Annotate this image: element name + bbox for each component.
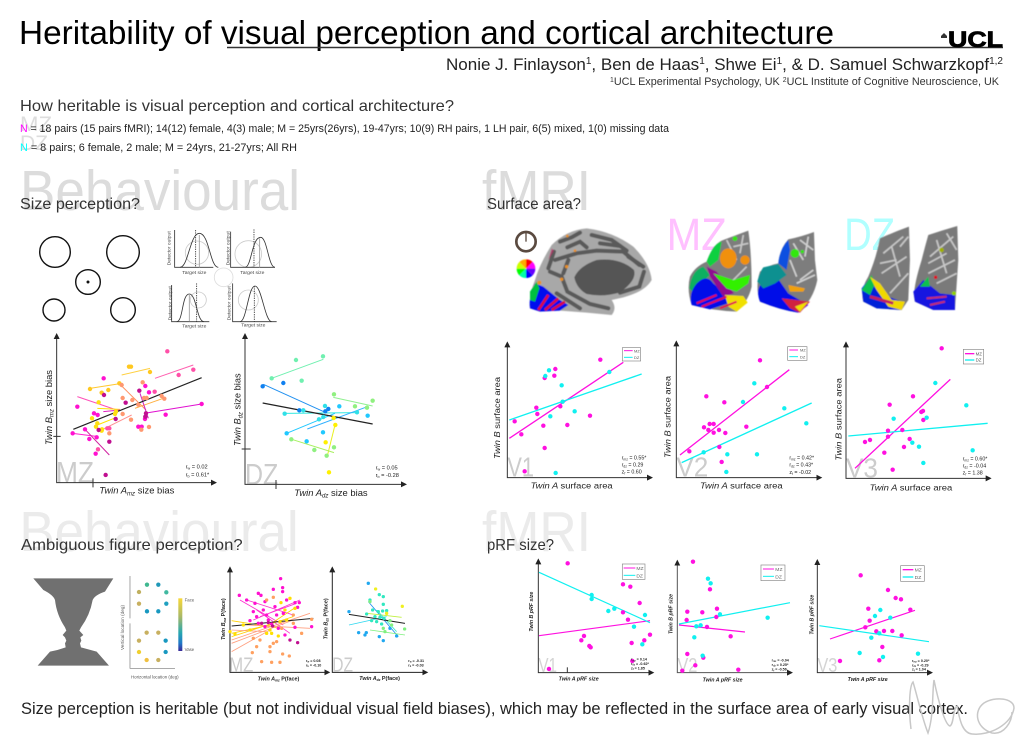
chart: DZ P(face) scatter: DZ <box>332 655 353 677</box>
legend: DZ <box>634 355 640 360</box>
chart: V2 pRF scatter: f <box>773 670 774 672</box>
MZ watermark: MZ <box>56 457 94 490</box>
statistics: r <box>789 455 814 461</box>
chart: MZ P(face) scatter: Twin A <box>258 676 275 682</box>
x axis label: size bias <box>328 488 368 498</box>
V3 watermark: V3 <box>846 453 878 484</box>
statistics: = 0.42* <box>796 455 814 461</box>
chart: MZ P(face) scatter: P(face) <box>221 598 227 618</box>
chart: MZ P(face) scatter <box>221 569 327 682</box>
detector output tuning curves: Target size <box>182 324 207 330</box>
statistics: = 0.43* <box>795 463 813 469</box>
location dot map <box>120 576 195 679</box>
chart: MZ P(face) scatter: r <box>306 663 321 668</box>
panel: size perception <box>20 159 300 330</box>
chart: V1 pRF scatter: V1 <box>538 655 557 677</box>
chart: V2 pRF scatter: Twin A pRF size <box>703 677 743 683</box>
y axis label: Twin B <box>44 417 54 445</box>
authors: , & D. Samuel Schwarzkopf <box>782 55 989 74</box>
statistics: z <box>622 469 642 475</box>
heading watermark: fMRI: fMRI <box>482 500 591 564</box>
detector output tuning curves: Target size <box>240 270 265 276</box>
conclusion: Size perception is heritable (but not individual visual field biases), which may be reflected in the surface area of early visual cortex. <box>21 699 968 718</box>
flat maps: DZ twin A <box>862 227 910 310</box>
chart: MZ size bias scatter <box>44 336 214 497</box>
authors: , Ben de Haas <box>591 55 699 74</box>
statistics: r <box>376 473 399 479</box>
statistics: mz <box>964 458 969 462</box>
chart: V2 pRF scatter: mz <box>773 661 777 663</box>
pair lines <box>73 365 202 455</box>
x axis label: Twin A <box>99 486 127 496</box>
location dot map: Face <box>185 597 195 602</box>
DZ watermark: DZ <box>20 132 48 155</box>
statistics: z <box>963 471 983 477</box>
y axis label: size bias <box>44 370 54 409</box>
chart: V2 pRF scatter <box>669 559 790 683</box>
chart: V2 pRF scatter: = 0.25* <box>776 663 789 667</box>
MZ watermark: MZ <box>20 113 52 136</box>
y axis label: mz <box>50 409 56 417</box>
heading: ambiguous figure: Ambiguous figure perception? <box>21 537 243 554</box>
statistics: mz <box>791 457 796 461</box>
V2 watermark: V2 <box>676 452 708 483</box>
axes <box>53 336 214 487</box>
chart: V3 surface area scatter <box>834 344 989 492</box>
legend: DZ <box>976 358 982 363</box>
statistics: r <box>186 472 210 478</box>
detector output tuning curves: Detector output <box>227 286 233 320</box>
title: Heritability of visual perception and cortical architecture <box>19 14 834 51</box>
charts: pRF V1 and V2 <box>529 559 790 683</box>
heading: size perception: Size perception? <box>20 196 140 213</box>
chart: V3 pRF scatter: V3 <box>817 655 837 677</box>
UCL logo: UCL <box>948 27 1003 52</box>
chart: V3 pRF scatter: r <box>912 659 930 664</box>
heading: pRF size: pRF size? <box>487 537 554 554</box>
chart: V2 pRF scatter: V2 <box>677 655 697 677</box>
statistics: r <box>789 463 813 469</box>
chart: V3 pRF scatter: MZ <box>915 568 922 574</box>
heading watermark: Behavioural: Behavioural <box>20 159 300 223</box>
chart: DZ P(face) scatter: P(face) <box>323 598 329 618</box>
authors: 1 <box>699 56 705 67</box>
chart: DZ P(face) scatter: b <box>410 666 412 668</box>
chart: V2 pRF scatter: = -0.04 <box>776 658 790 662</box>
chart: V3 pRF scatter: z <box>912 668 927 672</box>
axes <box>676 343 819 478</box>
chart: MZ P(face) scatter: w <box>307 662 309 664</box>
chart: V1 pRF scatter <box>529 561 652 682</box>
y axis label: dz <box>238 412 244 418</box>
signature <box>910 680 1014 734</box>
affiliations: UCL Experimental Psychology, UK <box>614 76 783 88</box>
statistics: r <box>963 463 986 469</box>
chart: V3 pRF scatter: DZ <box>915 575 921 581</box>
chart: DZ P(face) scatter: Twin A <box>359 676 376 682</box>
panel: pRF size <box>482 500 930 683</box>
chart: MZ P(face) scatter: mz <box>223 617 227 623</box>
panel: ambiguous figure perception <box>19 500 425 682</box>
statistics: = 0.60* <box>969 456 987 462</box>
legend <box>788 347 807 360</box>
statistics: f <box>624 471 625 475</box>
location dot map: Horizontal location (deg) <box>131 674 179 679</box>
axes <box>846 344 989 478</box>
chart: MZ P(face) scatter: P(face) <box>280 676 300 682</box>
chart: V3 pRF scatter: = 1.04 <box>915 668 927 672</box>
statistics: = 0.55* <box>628 455 646 461</box>
DZ label: DZ <box>844 209 895 260</box>
statistics: b <box>378 475 380 479</box>
regression lines <box>848 379 988 468</box>
statistics: = 0.02 <box>190 465 208 471</box>
chart: V1 pRF scatter: = -0.62* <box>635 662 650 666</box>
statistics: dz <box>964 465 968 469</box>
statistics: = 1.38 <box>966 471 983 477</box>
flat maps: DZ twin B <box>913 226 958 310</box>
y axis label: Twin B surface area <box>492 377 502 459</box>
authors: 1,2 <box>989 56 1003 67</box>
chart: V2 surface area scatter <box>663 343 819 491</box>
rubin vase stimulus <box>33 578 113 666</box>
chart: MZ P(face) scatter: b <box>307 666 309 668</box>
statistics: dz <box>623 464 627 468</box>
chart: V3 pRF scatter: r <box>912 663 929 668</box>
detector output tuning curves: Target size <box>241 323 266 329</box>
chart: V1 pRF scatter: Twin B pRF size <box>529 592 535 632</box>
statistics: f <box>792 472 793 476</box>
legend: MZ <box>976 351 982 356</box>
chart: DZ P(face) scatter: dz <box>377 678 381 682</box>
y axis label: Twin B surface area <box>834 378 844 461</box>
chart: V3 pRF scatter: dz <box>913 666 917 668</box>
chart: V2 pRF scatter: r <box>772 663 789 668</box>
chart: DZ P(face) scatter: = -0.31 <box>412 659 424 663</box>
chart: DZ size bias scatter <box>233 336 404 500</box>
chart: V2 pRF scatter: MZ <box>775 567 783 573</box>
statistics: w <box>378 467 381 471</box>
chart: V1 pRF scatter: Twin A pRF size <box>559 676 599 682</box>
statistics: r <box>376 465 398 471</box>
authors: , Shwe Ei <box>705 55 777 74</box>
chart: V3 pRF scatter: Twin B pRF size <box>809 595 815 635</box>
DZ watermark: DZ <box>245 458 278 491</box>
x axis label: Twin A surface area <box>531 481 613 491</box>
chart: V2 pRF scatter: Twin B pRF size <box>669 594 675 634</box>
legend: MZ <box>634 348 640 353</box>
chart: V3 pRF scatter: f <box>914 670 915 672</box>
chart: V1 pRF scatter: r <box>631 662 650 667</box>
legend: DZ <box>800 354 806 359</box>
data points <box>260 354 375 475</box>
chart: MZ P(face) scatter: Twin B <box>221 623 227 640</box>
chart: V2 pRF scatter: z <box>772 668 787 672</box>
detector output tuning curves: Detector output <box>168 286 174 320</box>
detector output tuning curves: Detector output <box>166 231 172 265</box>
detector output tuning curves: Target size <box>182 270 207 276</box>
chart: V2 pRF scatter: = -0.56 <box>774 668 787 672</box>
chart: DZ P(face) scatter: P(face) <box>380 676 400 682</box>
statistics: r <box>963 456 987 462</box>
brain retinotopy maps <box>516 209 958 315</box>
y axis label: Twin B surface area <box>663 376 673 458</box>
statistics: r <box>186 465 208 471</box>
pair lines <box>263 359 373 456</box>
x axis label: size bias <box>135 486 175 496</box>
flat maps: MZ twin B <box>757 232 817 313</box>
chart: V3 pRF scatter: mz <box>913 662 917 664</box>
flat maps: MZ twin A <box>689 231 752 312</box>
affiliations: 2 <box>783 77 787 84</box>
data points <box>687 358 809 474</box>
MZ label: MZ <box>667 209 727 260</box>
statistics: f <box>965 473 966 477</box>
chart: DZ P(face) scatter: = -0.03 <box>411 663 424 667</box>
statistics: = 0.05 <box>380 465 398 471</box>
chart: V3 pRF scatter <box>809 562 930 683</box>
chart: V1 pRF scatter: MZ <box>636 566 644 572</box>
statistics: w <box>188 467 191 471</box>
statistics: = -0.02 <box>793 470 811 476</box>
chart: MZ P(face) scatter: r <box>306 659 321 664</box>
chart: MZ P(face) scatter: MZ <box>229 655 253 677</box>
chart: DZ P(face) scatter: r <box>408 659 424 664</box>
chart: V1 pRF scatter: dz <box>632 665 636 667</box>
chart: MZ P(face) scatter: = 0.08 <box>309 659 321 663</box>
location dot map: Vertical location (deg) <box>120 605 125 650</box>
regression lines <box>509 362 642 438</box>
chart: DZ P(face) scatter: dz <box>325 618 329 622</box>
y axis label: size bias <box>233 373 243 412</box>
affiliations: 1 <box>610 77 614 84</box>
research question: How heritable is visual perception and cortical architecture? <box>20 98 454 115</box>
legend <box>622 348 641 361</box>
inflated brain <box>530 228 652 315</box>
x axis label: mz <box>127 491 135 497</box>
heading watermark: Behavioural: Behavioural <box>19 500 299 564</box>
authors: 1 <box>586 56 592 67</box>
x axis label: Twin A surface area <box>870 482 953 492</box>
detector output tuning curves <box>166 229 277 330</box>
statistics: = 0.29 <box>627 462 643 468</box>
legend: MZ <box>800 348 806 353</box>
location dot map: Vase <box>185 647 195 652</box>
chart: V1 pRF scatter: z <box>631 666 645 671</box>
chart: V1 pRF scatter: r <box>631 658 648 662</box>
chart: DZ P(face) scatter: w <box>410 662 412 664</box>
heading: surface area: Surface area? <box>487 196 581 213</box>
axes <box>242 336 404 489</box>
chart: V1 pRF scatter: = 1.85 <box>634 666 645 670</box>
statistics: r <box>622 455 646 461</box>
DZ sample description: N = 8 pairs; 6 female, 2 male; M = 24yrs, 21-27yrs; All RH <box>20 142 297 154</box>
authors: 1 <box>777 56 783 67</box>
chart: V1 pRF scatter: mz <box>632 660 636 662</box>
statistics: = 0.60 <box>625 469 642 475</box>
chart: V2 pRF scatter: r <box>772 658 790 663</box>
statistics: mz <box>623 457 628 461</box>
axes <box>507 344 650 478</box>
authors: Nonie J. Finlayson <box>446 55 586 74</box>
statistics: = 0.61* <box>190 472 210 478</box>
MZ sample description: N = 18 pairs (15 pairs fMRI); 14(12) female, 4(3) male; M = 25yrs(26yrs), 19-47yrs; 10(9) RH pairs, 1 LH pair, 6(5) mixed, 1(0) missing data <box>20 123 670 135</box>
chart: DZ P(face) scatter: r <box>408 663 424 668</box>
chart: V3 pRF scatter: = 0.20* <box>917 659 930 663</box>
regression lines <box>680 370 812 463</box>
chart: V1 surface area scatter <box>492 344 650 491</box>
chart: MZ P(face) scatter: mz <box>275 678 280 682</box>
detector output tuning curves: Detector output <box>225 231 231 265</box>
chart: DZ P(face) scatter <box>323 569 425 682</box>
statistics: dz <box>791 465 795 469</box>
chart: DZ P(face) scatter: Twin B <box>323 622 329 639</box>
chart: V1 pRF scatter: DZ <box>636 573 643 579</box>
statistics: z <box>789 470 811 476</box>
chart: V3 pRF scatter: Twin A pRF size <box>848 677 888 683</box>
chart: V2 pRF scatter: dz <box>773 666 776 668</box>
chart: V3 pRF scatter: = -0.29 <box>916 663 929 667</box>
heading watermark: fMRI: fMRI <box>482 159 591 223</box>
chart: MZ P(face) scatter: = -0.10 <box>309 663 321 667</box>
x axis label: dz <box>322 494 328 500</box>
data points <box>70 349 204 477</box>
statistics: r <box>622 462 643 468</box>
data points <box>512 357 612 475</box>
legend <box>963 349 984 364</box>
panel: surface area <box>482 159 958 315</box>
data points <box>863 346 975 472</box>
affiliations: UCL Institute of Cognitive Neuroscience, UK <box>787 76 1000 88</box>
statistics: = -0.28 <box>380 473 399 479</box>
statistics: = -0.04 <box>968 463 986 469</box>
Ebbinghaus-like stimulus circles <box>40 236 139 322</box>
chart: V2 pRF scatter: DZ <box>775 574 782 580</box>
x axis label: Twin A <box>294 488 322 498</box>
x axis label: Twin A surface area <box>700 481 783 491</box>
statistics: b <box>188 474 190 478</box>
chart: V1 pRF scatter: = 0.14 <box>636 658 648 662</box>
icon: polar clock <box>516 232 536 251</box>
icon: colour wheel <box>517 259 535 278</box>
y axis label: Twin B <box>233 418 243 446</box>
chart: V1 pRF scatter: f <box>633 669 634 671</box>
V1 watermark: V1 <box>507 452 534 483</box>
